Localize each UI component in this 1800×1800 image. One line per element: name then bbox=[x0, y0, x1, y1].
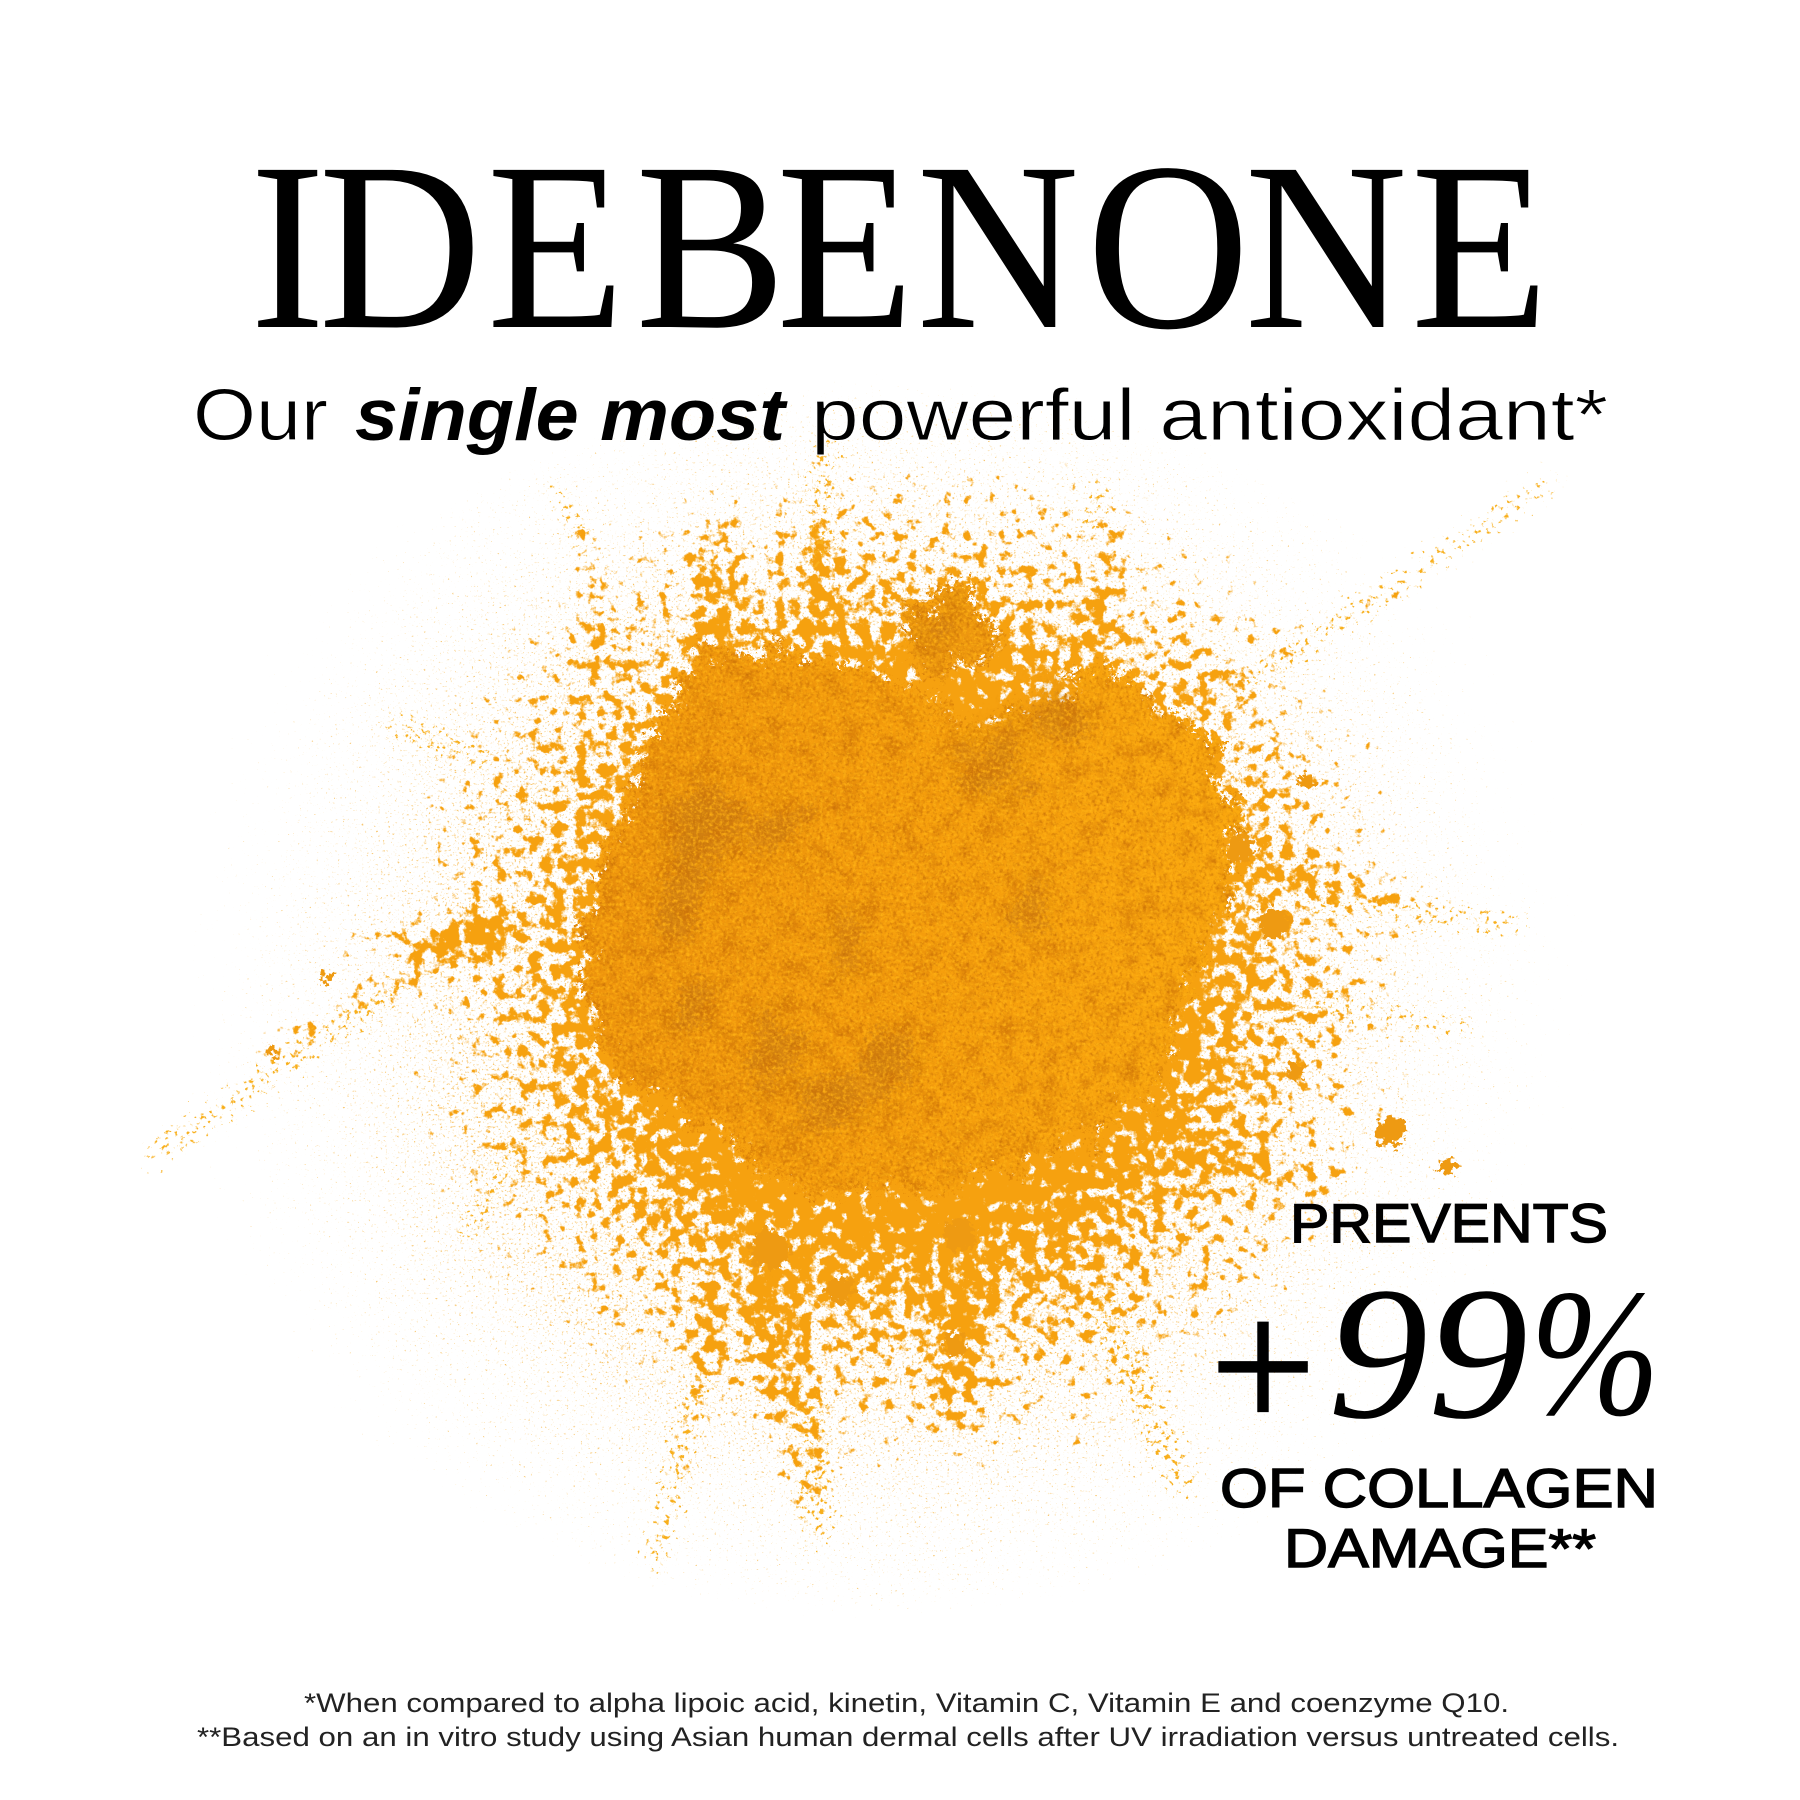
powder: central turmeric mound bbox=[585, 588, 1235, 1190]
title: IDEBENONE bbox=[250, 114, 1549, 380]
subtitle bbox=[193, 375, 1608, 456]
footnote 1: *When compared to alpha lipoic acid, kinetin, Vitamin C, Vitamin E and coenzyme Q10. bbox=[304, 1688, 1509, 1718]
powder: loose clumps bbox=[265, 774, 1456, 1357]
powder: fine dust halo bbox=[110, 380, 1650, 1620]
footnotes bbox=[197, 1688, 1619, 1752]
callout: prevents 99% of collagen damage bbox=[1210, 1192, 1660, 1579]
callout: plus sign: + bbox=[1210, 1262, 1316, 1472]
subtitle: powerful antioxidant: powerful antioxidant* bbox=[811, 375, 1608, 456]
subtitle: our: Our bbox=[193, 375, 328, 456]
powder: turmeric splatter burst bbox=[156, 430, 1546, 1560]
callout: percent: % bbox=[1530, 1253, 1660, 1454]
callout: of collagen: OF COLLAGEN bbox=[1220, 1457, 1658, 1519]
callout: prevents: PREVENTS bbox=[1290, 1192, 1608, 1254]
powder: chunky splatter bbox=[270, 430, 1435, 1490]
subtitle: single most: single most bbox=[355, 375, 788, 456]
callout: damage: DAMAGE** bbox=[1284, 1517, 1596, 1579]
callout: 99: 99 bbox=[1328, 1249, 1528, 1459]
powder: small scattered grains bbox=[156, 450, 1546, 1560]
footnote 2: **Based on an in vitro study using Asian human dermal cells after UV irradiation versus untreated cells. bbox=[197, 1722, 1619, 1752]
